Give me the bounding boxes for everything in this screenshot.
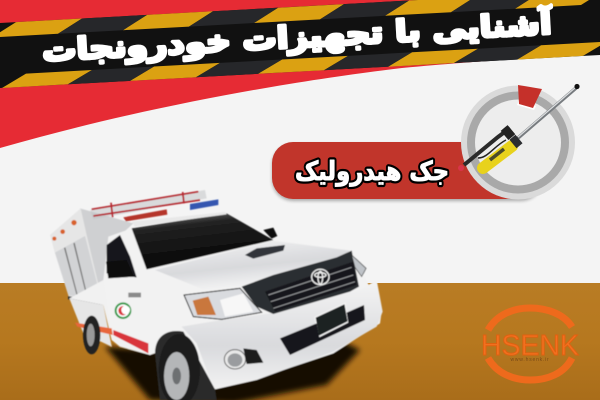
label text: جک هیدرولیک bbox=[295, 157, 449, 187]
label pill bbox=[272, 142, 542, 201]
left headlight bbox=[184, 288, 262, 319]
truck shadow bbox=[105, 340, 360, 400]
orange side stripe bbox=[75, 323, 113, 335]
red swoosh header bbox=[0, 0, 600, 148]
label text: جک هیدرولیک bbox=[295, 157, 449, 187]
HSENK logo bbox=[481, 308, 580, 380]
side mirror bbox=[106, 260, 134, 278]
toyota emblem bbox=[312, 269, 329, 285]
gauge icon with hydraulic jack bbox=[458, 84, 580, 200]
rear marker lights bbox=[52, 220, 77, 241]
license plate bbox=[315, 303, 348, 337]
lower side panel bbox=[69, 280, 157, 355]
right mirror bbox=[263, 228, 277, 239]
rescue truck bbox=[50, 190, 383, 400]
roof rack bbox=[90, 190, 207, 221]
red crescent logo bbox=[116, 303, 130, 318]
top tape stripes bbox=[0, 0, 600, 37]
right headlight bbox=[352, 255, 366, 277]
logo bottom arc bbox=[488, 358, 572, 380]
ground bbox=[0, 283, 600, 400]
hood bbox=[155, 241, 350, 291]
hazard tape banner bbox=[0, 0, 600, 88]
front bumper bbox=[182, 280, 383, 389]
front wheel arch bbox=[155, 331, 217, 400]
bottom tape stripes bbox=[2, 42, 600, 88]
jack rod bbox=[518, 88, 576, 138]
blue light bar bbox=[190, 199, 218, 210]
grille bbox=[265, 262, 357, 312]
logo wordmark: HSENK bbox=[481, 330, 580, 362]
logo top arc bbox=[488, 308, 572, 330]
red side stripe bbox=[113, 330, 148, 353]
hood scoop bbox=[245, 245, 285, 259]
rear compartment side bbox=[70, 208, 133, 303]
jack handle bbox=[464, 128, 510, 165]
main cab body bbox=[103, 213, 382, 388]
title: آشنایی با تجهیزات خودرونجات bbox=[41, 4, 553, 69]
rear wheel bbox=[83, 316, 100, 354]
windscreen bbox=[132, 213, 273, 269]
jack yellow cylinder bbox=[483, 146, 512, 168]
fog light bbox=[224, 348, 263, 369]
lower grille bbox=[280, 305, 365, 355]
logo url: www.hsenk.ir bbox=[510, 357, 550, 363]
red gauge wedge bbox=[518, 85, 542, 108]
rear compartment back face bbox=[50, 208, 103, 305]
door mark bbox=[128, 293, 141, 297]
front wheel bbox=[159, 334, 200, 400]
rear roller shutters bbox=[55, 236, 102, 305]
side window bbox=[107, 235, 137, 277]
hood deflector bbox=[242, 251, 359, 314]
